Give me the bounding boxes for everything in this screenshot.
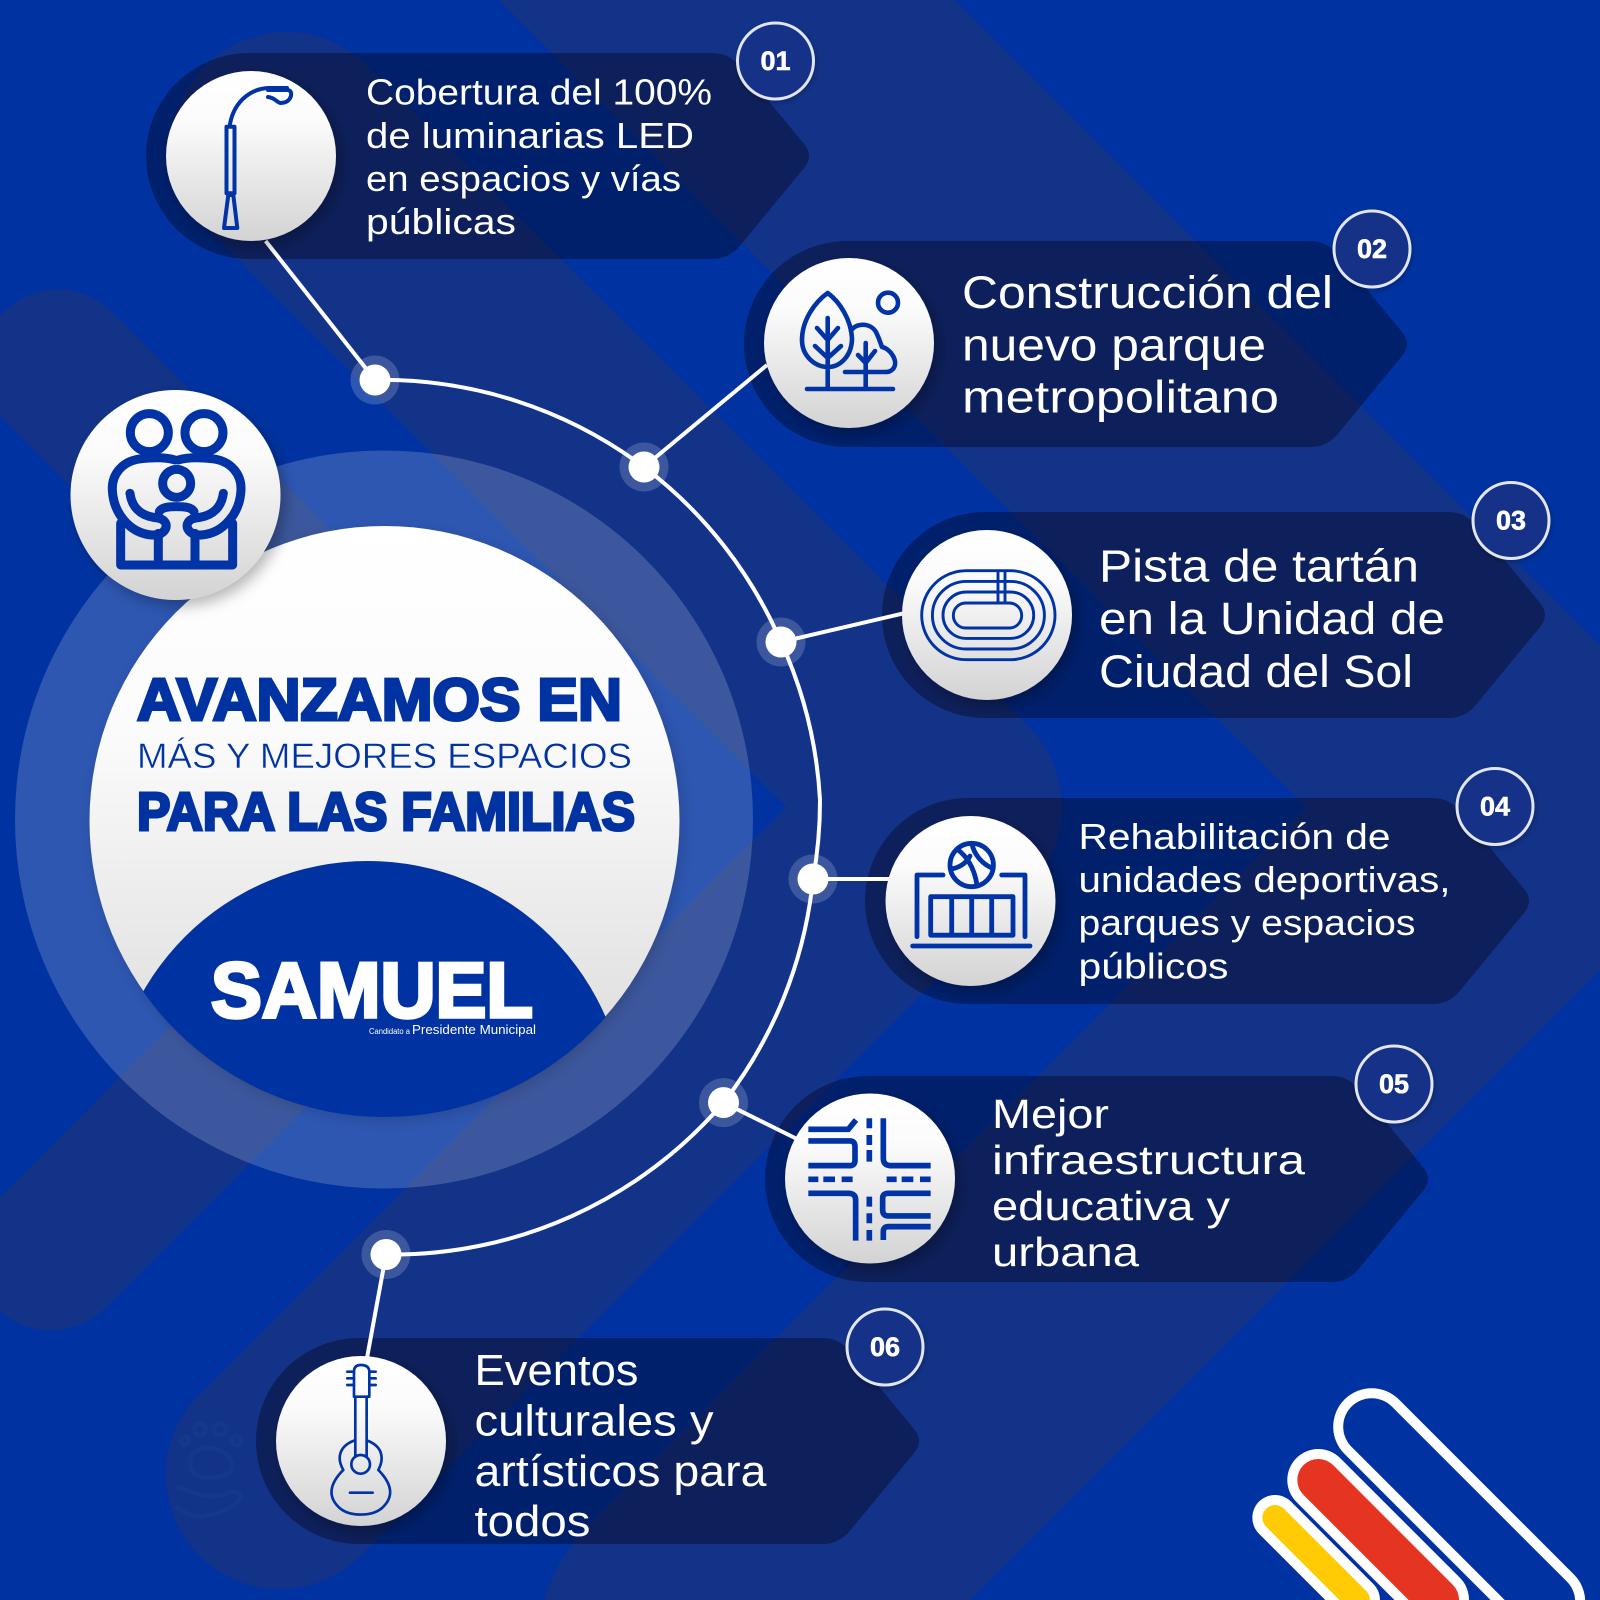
icon circle 02	[764, 258, 934, 428]
icon: street lamp	[224, 88, 291, 228]
text 06: culturales y	[474, 1396, 714, 1446]
badge 01: 01	[760, 46, 791, 76]
text 06	[474, 1346, 767, 1546]
pill 06	[256, 1338, 919, 1544]
connector nodes	[350, 356, 838, 1279]
pill 02	[744, 241, 1407, 447]
badge 04: 04	[1480, 792, 1510, 822]
panel: 06 eventos	[256, 1254, 923, 1546]
connector 01	[266, 241, 375, 380]
text 05: urbana	[992, 1229, 1140, 1275]
pill 03	[882, 512, 1545, 718]
icon circle 03	[902, 530, 1072, 700]
text 01	[366, 72, 712, 242]
text 04: unidades deportivas,	[1078, 859, 1450, 900]
title: AVANZAMOS EN	[137, 667, 622, 733]
text 01: Cobertura del 100%	[366, 72, 712, 112]
text 04: públicos	[1078, 946, 1228, 986]
text 02: nuevo parque	[962, 320, 1266, 370]
badge 02: 02	[1357, 234, 1387, 264]
text 03	[1099, 540, 1445, 697]
connector 04	[813, 877, 890, 881]
connector 02	[644, 365, 767, 467]
text 02	[962, 267, 1333, 422]
text 05	[992, 1091, 1306, 1275]
icon: guitar	[331, 1365, 390, 1515]
connector arc with lines	[375, 380, 820, 1255]
text 01: en espacios y vías	[366, 158, 681, 199]
icon: running track	[922, 571, 1055, 660]
icon circle 01	[166, 71, 336, 241]
text 05: infraestructura	[992, 1137, 1306, 1183]
text 04: Rehabilitación de	[1078, 816, 1390, 857]
text 04: parques y espacios	[1078, 902, 1416, 943]
text 05: educativa y	[992, 1183, 1231, 1229]
icon: sports building	[913, 843, 1030, 946]
badge 05: 05	[1379, 1069, 1409, 1099]
panel: 04 unidades deportivas	[813, 768, 1533, 1004]
badge 06: 06	[870, 1332, 900, 1362]
icon: road intersection	[808, 1118, 931, 1241]
badge 03: 03	[1496, 506, 1526, 536]
badge 01	[738, 23, 814, 99]
text 06: Eventos	[474, 1346, 638, 1395]
connector 03	[781, 613, 905, 642]
text 06: todos	[474, 1497, 590, 1546]
panel: 05 infraestructura	[724, 1046, 1432, 1282]
text 02: metropolitano	[962, 372, 1279, 422]
watermark paw logo	[175, 1423, 241, 1517]
panel: 03 pista	[781, 482, 1549, 718]
connector 06	[367, 1254, 386, 1358]
main circle	[89, 526, 686, 1124]
central ring	[15, 450, 753, 1188]
icon circle 04	[886, 816, 1056, 986]
candidate logo: SAMUEL	[211, 946, 533, 1034]
icon: trees	[802, 293, 898, 389]
text 04	[1078, 816, 1450, 986]
text 05: Mejor	[992, 1091, 1109, 1137]
pill 01	[146, 53, 809, 259]
text 01: públicas	[366, 201, 516, 242]
text 03: Ciudad del Sol	[1099, 646, 1413, 697]
text 06: artísticos para	[474, 1447, 767, 1496]
text 03: Pista de tartán	[1099, 540, 1419, 592]
bottom-right brand logo	[1275, 1427, 1547, 1600]
pill 04	[865, 798, 1529, 1004]
candidate logo: Candidato a	[369, 1027, 411, 1036]
badge 04	[1457, 768, 1533, 844]
title	[137, 667, 635, 842]
icon circle 06	[276, 1356, 446, 1526]
badge 02	[1334, 211, 1410, 287]
title: PARA LAS FAMILIAS	[137, 782, 635, 842]
title: MÁS Y MEJORES ESPACIOS	[137, 736, 632, 776]
text 02: Construcción del	[962, 267, 1333, 318]
text 01: de luminarias LED	[366, 115, 694, 156]
connector 05	[724, 1103, 797, 1139]
panel: 01 luminarias	[146, 23, 814, 380]
blue cap	[143, 861, 606, 1117]
icon circle 05	[785, 1094, 955, 1264]
icon: family	[70, 390, 280, 600]
candidate logo: Presidente Municipal	[412, 1022, 536, 1037]
badge 05	[1356, 1046, 1432, 1122]
pill 05	[765, 1076, 1428, 1282]
badge 03	[1473, 482, 1549, 558]
panel: 02 parque	[644, 211, 1410, 467]
badge 06	[847, 1309, 923, 1385]
text 03: en la Unidad de	[1099, 593, 1445, 644]
